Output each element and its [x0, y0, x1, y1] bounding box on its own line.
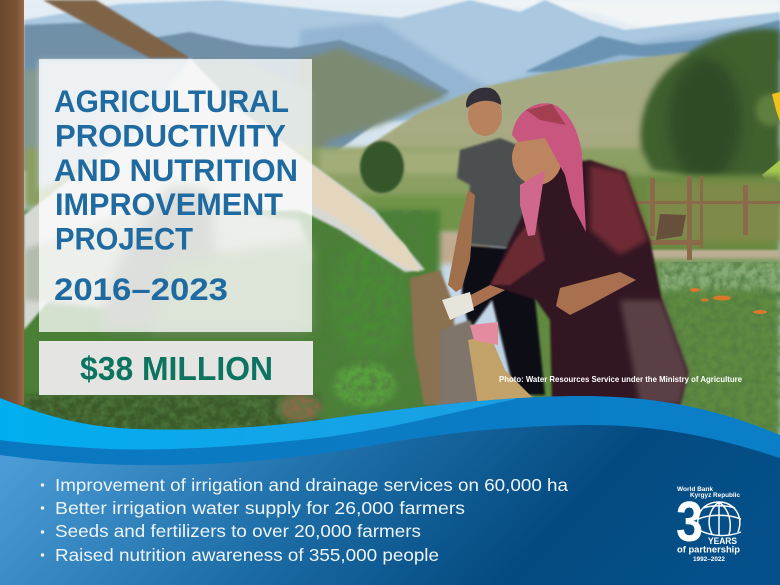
funding amount panel: $38 MILLION	[80, 350, 273, 387]
bullet: irrigation and drainage: Improvement of irrigation and drainage services on 60,000 ha	[55, 475, 568, 495]
wooden fence	[632, 176, 780, 260]
man in grey shirt	[448, 88, 545, 395]
title: PROJECT	[55, 220, 193, 256]
irrigation pipe and cloth	[410, 270, 535, 405]
bullet: seeds and fertilizers: Seeds and fertilizers to over 20,000 farmers	[55, 521, 421, 541]
garden and path	[540, 175, 780, 265]
title: IMPROVEMENT	[55, 186, 283, 222]
title: PRODUCTIVITY	[55, 118, 286, 154]
figure seen through plastic	[100, 185, 300, 330]
title	[54, 83, 298, 307]
logo: World Bank 30 years of partnership: YEARS	[708, 536, 737, 546]
foliage texture	[24, 210, 780, 437]
logo: World Bank 30 years of partnership: World Bank	[677, 486, 713, 493]
funding amount panel	[39, 341, 313, 395]
valley fields	[24, 148, 780, 208]
blue wave footer	[0, 396, 780, 585]
logo: World Bank 30 years of partnership: 3	[676, 490, 703, 554]
title: 2016–2023	[54, 271, 228, 307]
orange marigolds	[690, 288, 767, 314]
logo: World Bank 30 years of partnership: of partnership	[677, 544, 741, 554]
woman in patterned dress	[440, 103, 688, 405]
wooden post	[0, 0, 24, 405]
title: AND NUTRITION	[54, 152, 298, 188]
photo credit: Photo: Water Resources Service under the Ministry of Agriculture	[499, 374, 742, 384]
sunflower and leaf	[762, 92, 780, 182]
bullet: water supply: Better irrigation water supply for 26,000 farmers	[55, 498, 465, 518]
large tree	[641, 29, 780, 200]
diagonal log	[43, 0, 190, 58]
bullet list	[41, 475, 568, 565]
plants at bottom	[0, 210, 440, 435]
title panel	[39, 59, 312, 332]
logo: World Bank 30 years of partnership	[676, 486, 741, 563]
plastic greenhouse sheet	[24, 58, 425, 330]
bullet: nutrition awareness: Raised nutrition awareness of 355,000 people	[55, 545, 439, 565]
logo: World Bank 30 years of partnership: 1992–2022	[693, 556, 726, 563]
pale area behind amount panel	[39, 341, 313, 395]
logo: World Bank 30 years of partnership: Kyrgyz Republic	[690, 492, 740, 499]
icon: globe	[698, 502, 741, 535]
green-khaki foreground hill	[362, 52, 690, 170]
title: AGRICULTURAL	[54, 83, 289, 119]
